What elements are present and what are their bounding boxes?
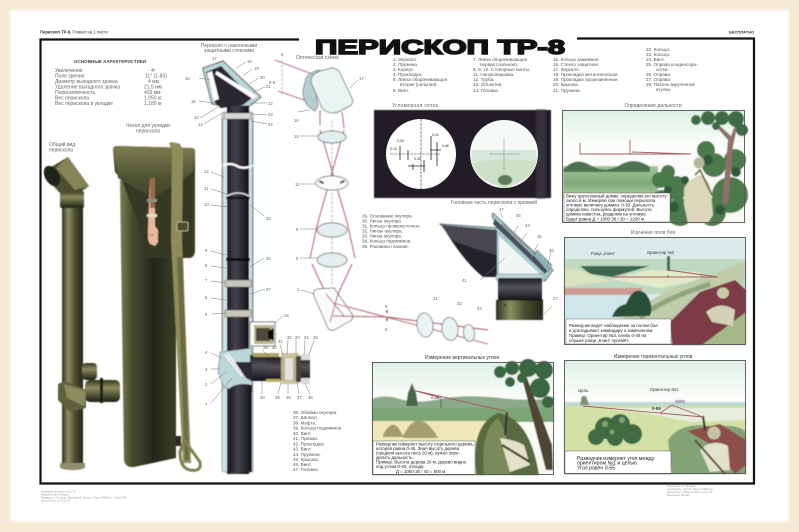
text box: которая равна 0-46. Зная высоту дерева [376, 446, 460, 451]
parts list 1–6: 1. Зеркало. [393, 57, 417, 62]
text box: опушке рощи „Клин“ пулемёт. [569, 338, 629, 343]
optical scheme numbers: 8 [296, 256, 299, 261]
specifications table: 4ˣ [151, 68, 156, 74]
text box: Пример: Высота дерева 20 м, дерево видно [376, 460, 467, 464]
imprint left [41, 490, 127, 502]
sight lines [580, 140, 691, 155]
parts list 29–35: 34. Кольцо поджимное. [362, 238, 412, 244]
angle label: 0-46 [431, 395, 440, 400]
callout numbers: 7 [205, 278, 208, 283]
eyepiece [253, 353, 310, 384]
callout numbers: 33 [295, 335, 300, 340]
parts list 7–14: 13. Объектив. [473, 82, 503, 87]
callout numbers: 18 [185, 76, 190, 81]
optical scheme numbers: 15 [294, 134, 299, 139]
specifications table: 11° (1-83) [145, 74, 167, 80]
parts list 36–47: 45. Крышка. [293, 457, 319, 462]
labels: Ориентир №3 [647, 250, 675, 255]
specifications table: 1,050 кг [144, 96, 162, 102]
specifications table: Вес перископа в укладке [55, 101, 113, 107]
callout numbers: 26 [266, 256, 271, 261]
specifications table: Поле зрения [55, 74, 85, 80]
caption: general view [49, 141, 75, 154]
parts list 15–21: 20. Крышка. [553, 82, 579, 87]
imprint right: Воениздат, Москва [667, 493, 690, 497]
tube outlines [222, 118, 252, 350]
parts list 29–35 [362, 214, 421, 249]
parts list 7–14: 11. Нанокопировка. [473, 72, 514, 77]
parts list 36–47: 39. Кольцо поджимное. [293, 426, 343, 430]
T-joint [218, 348, 252, 392]
side housing [250, 322, 275, 346]
parts list 7–14: первая (сильная). [480, 62, 518, 67]
text box: около 6 м. Измеряю при помощи перископа [566, 198, 656, 203]
labels: Ориентир №1 [650, 387, 679, 392]
general view periscope illustration [40, 157, 120, 470]
callout numbers: 6 [205, 295, 208, 300]
scene: vertical angles [372, 359, 554, 475]
specifications table: Удаление выходного зрачка [55, 84, 120, 90]
callout numbers: 35 [313, 335, 318, 340]
head callouts: 41 [462, 278, 467, 283]
specifications table [55, 59, 167, 107]
optical scheme numbers: 16 [294, 118, 299, 123]
optical scheme numbers: 32 [457, 301, 462, 306]
optical scheme numbers [269, 52, 482, 332]
scene caption: vertical angles: Измерение вертикальных углов [425, 355, 499, 361]
parts list 22–28: сетки. [656, 67, 669, 72]
optical scheme numbers: 1 [297, 287, 300, 292]
callout numbers: 20 [260, 75, 265, 80]
labels [578, 387, 679, 411]
optical scheme numbers: 17 [359, 76, 364, 81]
ring [224, 113, 251, 119]
sectional periscope drawing [203, 61, 310, 474]
callout numbers: 40 [260, 395, 265, 400]
parts list 36–47: 41. Призма. [293, 436, 318, 441]
head callouts [462, 207, 558, 318]
head callouts: 46 [549, 248, 554, 253]
parts list 29–35: 35. Роковина глазная. [362, 244, 409, 249]
callout numbers: 17 [212, 56, 217, 61]
parts list 1–6 [393, 57, 448, 93]
parts list 22–28: 26. Оправа. [646, 72, 671, 77]
caption: bag [126, 123, 170, 134]
parts list 22–28 [646, 47, 698, 92]
parts list 22–28: 28. Патрон вкрученной [646, 81, 695, 87]
optical scheme numbers: 6 [385, 327, 388, 332]
specifications table: Вес перископа [55, 96, 89, 102]
optical scheme numbers: 6 [281, 52, 284, 57]
imprint left: Цена 15 коп. № 4012-76 [41, 498, 71, 502]
labels: Роща „Клин“ [591, 251, 616, 256]
text box: Д = 1000·20 / 40 = 500 м. [396, 469, 446, 474]
scene caption: battlefield: Изучение поля боя [631, 230, 675, 236]
parts list 1–6: 4. Прокладка. [393, 72, 422, 77]
parts list 36–47: 36. Обойма окуляра. [293, 409, 337, 415]
text box: и докладывает командиру о замеченном. [569, 328, 653, 333]
text box: (средняя высота леса 20 м), нужно опре- [376, 450, 460, 456]
caption: bag: перископа [136, 128, 160, 134]
text box: определяю, пользуясь формулой. Высота [566, 207, 652, 212]
text box: Угол равен 0-55 [577, 466, 615, 472]
sight lines [583, 405, 703, 417]
reticle scale disc: 0-30 [397, 139, 404, 143]
parts list 36–47: 47. Головка. [293, 467, 319, 472]
parts list 22–28: 27. Оправа. [646, 77, 671, 82]
head sectional drawing [440, 213, 553, 320]
specifications table: 4 мм [148, 79, 160, 85]
callout numbers: 15 [191, 99, 196, 104]
imprint left: Подписано к печати 10.11.76 [41, 490, 76, 494]
optical scheme numbers: 9 [296, 227, 299, 232]
labels: 0-55 [652, 406, 661, 411]
imprint right [667, 484, 714, 497]
text box: под углом 0-40, отсюда [376, 464, 424, 469]
frame [40, 38, 754, 484]
callout numbers: 29 [263, 345, 268, 350]
text box: Вижу двухэтажный домик, определяю его высоту: [566, 194, 668, 198]
specifications table: ОСНОВНЫЕ ХАРАКТЕРИСТИКИ [74, 59, 146, 64]
parts list 36–47: 40. Винт. [293, 431, 312, 436]
parts list 36–47: 43. Винт. [293, 446, 312, 452]
callout numbers: 3 [205, 367, 208, 372]
callout numbers: 11 [204, 186, 209, 191]
callout numbers: 8 [205, 263, 208, 268]
callout numbers: 5 [205, 312, 208, 317]
head callouts: 44 [525, 223, 530, 228]
labels [591, 250, 675, 256]
text box [565, 451, 671, 474]
parts list 15–21: 21. Пружина. [553, 88, 581, 93]
parts list 1–6: 6. Винт. [393, 88, 409, 93]
parts list 36–47 [293, 409, 343, 472]
text box: домика известна, разделив на угловую. [566, 212, 647, 216]
caption: periscope with tilted glass: Перископ с наклонными [201, 43, 257, 49]
parts list 36–47: 38. Муфта. [293, 420, 316, 426]
reticle scale disc: 0-10 [432, 133, 439, 137]
optical scheme numbers: 6 [385, 304, 388, 309]
callout numbers: 14 [194, 115, 199, 120]
head callouts: 45 [516, 213, 521, 218]
parts list 29–35: 32. Линзы окуляра. [362, 228, 403, 234]
callout numbers: 24 [268, 122, 273, 127]
text box: ориентиром №1 и целью. [577, 460, 638, 466]
caption: reticle: Угломерная сетка [392, 103, 438, 109]
caption: periscope with tilted glass: защитными стеклами [204, 48, 254, 54]
parts list 1–6: вторая (сильная). [400, 82, 438, 87]
imprint left: Издательство «Плакат» [41, 492, 70, 496]
scene caption: horizontal angles: Измерение горизонтальных углов [614, 354, 693, 360]
text box: Разведчик измеряет высоту отдельного дерева, [376, 442, 474, 446]
callout numbers: 2 [205, 382, 208, 387]
parts list 22–28: втулки. [656, 87, 671, 92]
specifications table: 403 мм [144, 90, 161, 96]
text box: Пример: Ориентир №3, влево 0-40 на [569, 333, 647, 338]
text box: Разведчик измеряет угол между [577, 456, 655, 462]
scene caption: range: Определение дальности [624, 103, 682, 109]
parts list 29–35: 33. Линза окуляра. [362, 234, 402, 238]
free mark: БЕСПЛАТНО [729, 30, 754, 34]
text box [373, 441, 475, 475]
callout numbers: 12 [204, 169, 209, 174]
parts list 22–28: 24. Винт. [646, 57, 665, 62]
callout numbers: 19 [254, 66, 259, 71]
parts list 15–21: 18. Прокладка металлическая. [553, 72, 619, 77]
reticle field view [470, 120, 538, 188]
text box [564, 193, 670, 222]
reticle scale disc: 0-46 [442, 144, 449, 148]
sleeves [227, 193, 249, 196]
parts list 36–47: 37. Шплинт. [293, 415, 318, 420]
callout numbers [185, 56, 318, 406]
callout numbers: 23 [268, 112, 273, 117]
parts list 15–21: 17. Зеркало. [553, 67, 580, 72]
specifications table: 1,180 кг [144, 101, 162, 107]
callout numbers: 38 [286, 395, 291, 400]
callout numbers: 31 [278, 339, 283, 344]
callout numbers: 39 [275, 395, 280, 400]
callout numbers: 9 [205, 248, 208, 253]
callout numbers: 28 [284, 313, 289, 318]
parts list 1–6: 3. Корпус. [393, 67, 414, 72]
caption: head with curved: Головная часть перископа с призмой [451, 199, 537, 206]
callout numbers: 4 [205, 350, 208, 355]
callout numbers: 34 [304, 335, 309, 340]
imprint right: Цена 15 коп. Заказ № 568 от 10.11.76 [667, 490, 713, 494]
parts list 15–21 [553, 57, 619, 93]
head assembly [203, 61, 261, 108]
callout numbers: 1 [205, 401, 208, 406]
caption: bag: Чехол для укладки [126, 123, 170, 129]
text box: делить дальность. [376, 455, 414, 460]
callout numbers: 16 [247, 59, 252, 64]
parts list 1–6: 2. Пружина. [393, 62, 418, 67]
text box: Разведчик ведёт наблюдение за полем боя [569, 323, 658, 328]
head callouts: 47 [499, 207, 504, 212]
optical scheme numbers: 33 [477, 306, 482, 311]
parts list 15–21: 16. Стекло защитное. [553, 62, 599, 67]
reticle scale disc: 0-10 [390, 147, 397, 151]
specifications table: Диаметр выходного зрачка [55, 79, 118, 85]
parts list 7–14 [473, 57, 530, 93]
caption: general view: Общий вид [49, 141, 75, 148]
scene: horizontal angles [564, 360, 746, 474]
optical scheme numbers: 11 [295, 182, 300, 187]
text box [566, 319, 671, 344]
callout numbers: 21 [266, 84, 271, 89]
caption: periscope with tilted glass [201, 43, 257, 54]
parts list 22–28: 23. Кольцо. [646, 52, 670, 57]
callout numbers: 27 [266, 287, 271, 292]
parts list 22–28: 25. Оправа конденсора- [646, 62, 698, 67]
parts list 15–21: 19. Прокладка прорезиненная. [553, 77, 619, 82]
sight lines [612, 270, 718, 278]
callout numbers: 10 [204, 202, 209, 207]
specifications table: 21,5 мм [144, 84, 163, 90]
parts list 7–14: 12. Труба. [473, 77, 494, 82]
parts list 36–47: 46. Винт. [293, 462, 312, 467]
scene: range determination [562, 110, 748, 226]
reticle scale disc: 0-30 [414, 157, 421, 161]
callout numbers: 22 [268, 101, 273, 106]
callout numbers: 37 [297, 395, 302, 400]
reticle scale disc [386, 119, 456, 189]
caption: general view: перископа [49, 148, 73, 154]
imprint right: Художник Н. Петров. Тираж 30000 экз. [667, 487, 714, 491]
specifications table: Перископичность [55, 90, 96, 96]
callout numbers: 32 [287, 335, 292, 340]
parts list 36–47: 44. Пружина. [293, 452, 321, 457]
reticle panel [374, 110, 551, 198]
specifications table: Увеличение [55, 68, 83, 74]
title: ПЕРИСКОП ТР-8 [315, 37, 565, 59]
parts list 7–14: 8, 9, 10. Стопорные винты. [473, 67, 530, 72]
sight lines [412, 390, 505, 411]
upper dark tube [227, 106, 249, 474]
optical scheme numbers: 31 [433, 296, 438, 301]
optical scheme numbers: 8-9 [269, 80, 276, 85]
parts list 29–35: 31. Кольцо промежуточное. [362, 224, 421, 228]
callout numbers: 36 [308, 395, 313, 400]
imprint left: Редактор А. Тихонов. Художник В. Петров. Тираж 30000 экз. Заказ 568 [41, 496, 127, 500]
head callouts: 45 [537, 234, 542, 239]
parts list 29–35: 30. Линза окуляра. [362, 218, 402, 224]
parts list 22–28: 22. Кольцо. [646, 47, 670, 52]
parts list 7–14: 7. Линза оборачивающая [473, 57, 528, 62]
imprint right: Редактор А. А. Тихонов [667, 484, 696, 488]
outer wall of tube [222, 112, 253, 472]
parts list 29–35: 29. Основание окуляра. [362, 214, 413, 218]
labels: Цель [578, 388, 589, 393]
head callouts: 27 [553, 296, 558, 301]
callout numbers: 25 [266, 216, 271, 221]
carrying bag illustration [113, 142, 200, 470]
caption: optical scheme: Оптическая схема [296, 55, 339, 61]
parts list 1–6: 5. Линза оборачивающая [393, 77, 448, 82]
header note: Перископ ТР-8. Плакат на 1 листе [40, 30, 109, 34]
scene: battlefield study [564, 237, 746, 345]
callout numbers: 13 [198, 122, 203, 127]
callout numbers: 30 [272, 345, 277, 350]
optical scheme [275, 60, 488, 344]
text box: Будет равна Д = 1000·36 / 30 = 1200 м. [566, 216, 645, 222]
parts list 15–21: 15. Кольцо зажимное. [553, 57, 600, 62]
text box: угловую величину домика: 0-30. Дальность [566, 202, 655, 208]
parts list 7–14: 14. Головка. [473, 88, 499, 93]
parts list 36–47: 42. Прокладка. [293, 442, 325, 446]
tube break [221, 164, 254, 168]
